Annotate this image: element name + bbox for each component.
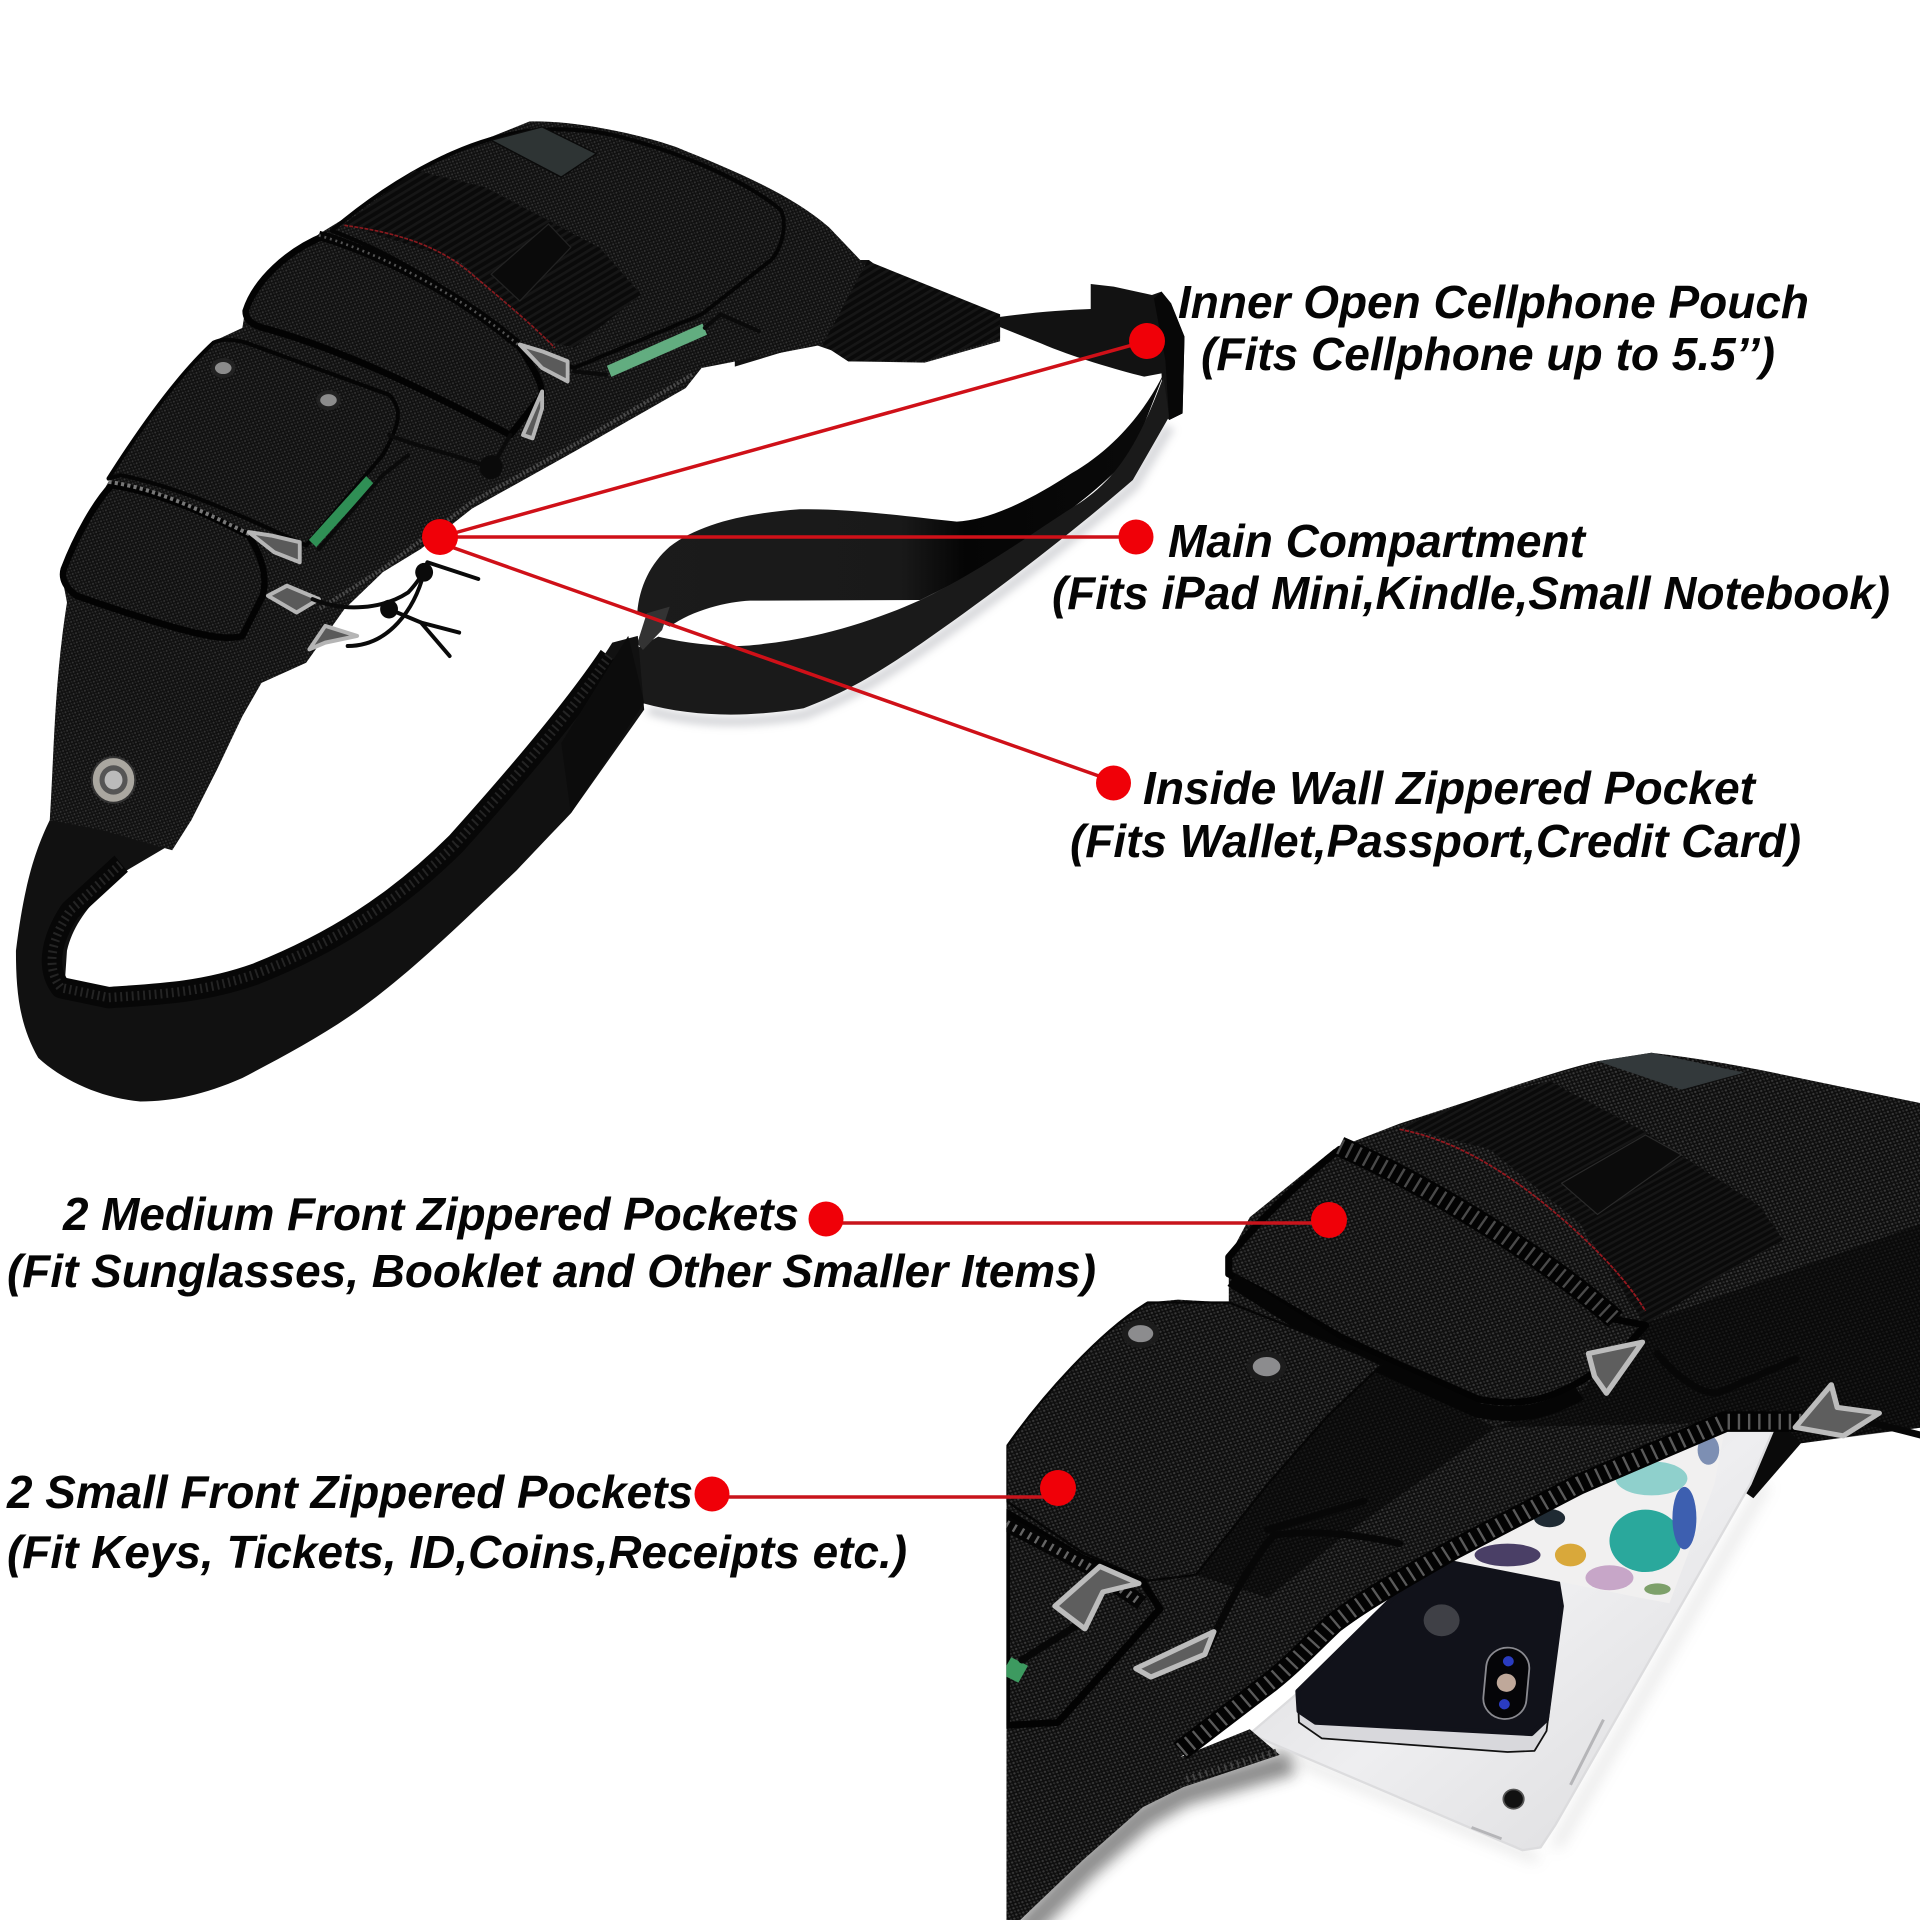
bottom product photo: open bag with tablet and phone bbox=[1006, 1053, 1920, 1920]
lower small pocket bbox=[1006, 1512, 1160, 1725]
callout: 2 small front zippered pockets: 2 Small Front Zippered Pockets bbox=[6, 1466, 693, 1518]
small pocket bbox=[1006, 1302, 1382, 1581]
leader line: small pockets bbox=[694, 1470, 1076, 1512]
green tube bbox=[1006, 1666, 1023, 1674]
metal zipper pulls bbox=[249, 345, 568, 649]
main body bbox=[50, 121, 1000, 850]
card with holographic print bbox=[1454, 1438, 1720, 1595]
soft shadow under bag bbox=[1022, 1762, 1292, 1920]
callout: 2 small front zippered pockets: (Fit Keys, Tickets, ID,Coins,Receipts etc.) bbox=[7, 1526, 907, 1578]
callout: inside wall zippered pocket: Inside Wall Zippered Pocket bbox=[1143, 762, 1757, 814]
rivet bbox=[92, 757, 135, 803]
red stitching bbox=[344, 225, 555, 348]
webbing panel bbox=[1400, 1081, 1783, 1325]
main zipper teeth bbox=[1180, 1422, 1801, 1751]
right dark shade bbox=[1496, 1223, 1920, 1443]
leader line to wall pocket bbox=[440, 543, 1113, 781]
callout: 2 medium front zippered pockets: (Fit Sunglasses, Booklet and Other Smaller Items) bbox=[7, 1245, 1096, 1297]
patch bbox=[1562, 1135, 1681, 1214]
callout: 2 medium front zippered pockets: 2 Medium Front Zippered Pockets bbox=[62, 1188, 799, 1240]
main zipper bbox=[319, 375, 692, 609]
callout: 2 medium front zippered pockets bbox=[7, 1188, 1096, 1297]
callout: main compartment: Main Compartment bbox=[1168, 515, 1587, 567]
back lip of bag bbox=[1746, 1432, 1801, 1498]
phone bbox=[1298, 1541, 1562, 1752]
cords and knots bbox=[313, 314, 759, 656]
callout: inner open cellphone pouch: Inner Open Cellphone Pouch bbox=[1178, 276, 1809, 328]
dot: cellphone pouch bbox=[1129, 323, 1165, 359]
callout: main compartment bbox=[1052, 515, 1890, 619]
metal zipper pulls bbox=[1055, 1342, 1879, 1677]
eyelet bbox=[318, 392, 339, 408]
top product photo: full sling bag bbox=[16, 121, 1184, 1101]
crease shade bbox=[1196, 1371, 1496, 1598]
dot: wall pocket bbox=[1096, 766, 1131, 800]
green tube bbox=[609, 329, 705, 371]
small pocket upper bbox=[108, 340, 398, 546]
small pocket lower bbox=[63, 485, 265, 638]
patch bbox=[491, 224, 571, 301]
mesh texture bbox=[52, 656, 609, 998]
phone camera bbox=[1482, 1646, 1531, 1721]
callout: inside wall zippered pocket bbox=[1070, 762, 1801, 867]
medium pocket bbox=[1229, 1149, 1645, 1402]
patch bbox=[491, 127, 596, 177]
shadow right of tablet bbox=[1262, 1484, 1765, 1859]
callout: inner open cellphone pouch bbox=[1178, 276, 1809, 380]
eyelet bbox=[213, 360, 233, 376]
tablet camera bbox=[1503, 1789, 1524, 1809]
callout: inner open cellphone pouch: (Fits Cellphone up to 5.5’’) bbox=[1201, 328, 1775, 380]
leader line to main compartment bbox=[440, 535, 1136, 539]
bag body and padded shoulder strap bbox=[16, 121, 1000, 1101]
eyelet bbox=[1250, 1354, 1283, 1379]
leader line to cellphone pouch bbox=[440, 341, 1147, 537]
apple logo bbox=[1424, 1604, 1460, 1636]
callout: inside wall zippered pocket: (Fits Wallet,Passport,Credit Card) bbox=[1070, 815, 1801, 867]
green tube bbox=[313, 480, 370, 544]
webbing right of body bbox=[823, 261, 1000, 361]
dot: main compartment bbox=[1118, 520, 1154, 554]
tablet buttons bbox=[1472, 1720, 1603, 1839]
red stitching bbox=[1400, 1129, 1645, 1311]
medium pocket lower bbox=[246, 235, 542, 435]
zipper bbox=[319, 235, 518, 345]
zipper bbox=[108, 482, 252, 535]
leader line: medium pockets bbox=[808, 1202, 1347, 1238]
tablet bbox=[1250, 1416, 1774, 1850]
zipper teeth bbox=[1340, 1146, 1615, 1319]
small pocket zipper bbox=[1006, 1524, 1142, 1603]
mesh edge on strap bbox=[52, 656, 609, 998]
callout: main compartment: (Fits iPad Mini,Kindle,Small Notebook) bbox=[1052, 567, 1890, 619]
medium pocket seam bbox=[1232, 1280, 1580, 1414]
strap: adjustable webbing loop and buckle bbox=[628, 260, 1184, 721]
bag front with zipper mouth bbox=[1006, 1053, 1920, 1920]
hub dot bbox=[422, 519, 458, 555]
eyelet bbox=[1125, 1322, 1156, 1345]
cords bbox=[1022, 1354, 1920, 1660]
top patch bbox=[1597, 1053, 1744, 1090]
medium pocket upper bbox=[332, 129, 784, 368]
callout: 2 small front zippered pockets bbox=[6, 1466, 907, 1578]
callout lines and hub dot for main bag bbox=[422, 323, 1165, 800]
webbing panel with patches bbox=[344, 170, 641, 348]
lower zipper edge bbox=[1187, 1752, 1277, 1779]
cord knots bbox=[380, 455, 503, 619]
